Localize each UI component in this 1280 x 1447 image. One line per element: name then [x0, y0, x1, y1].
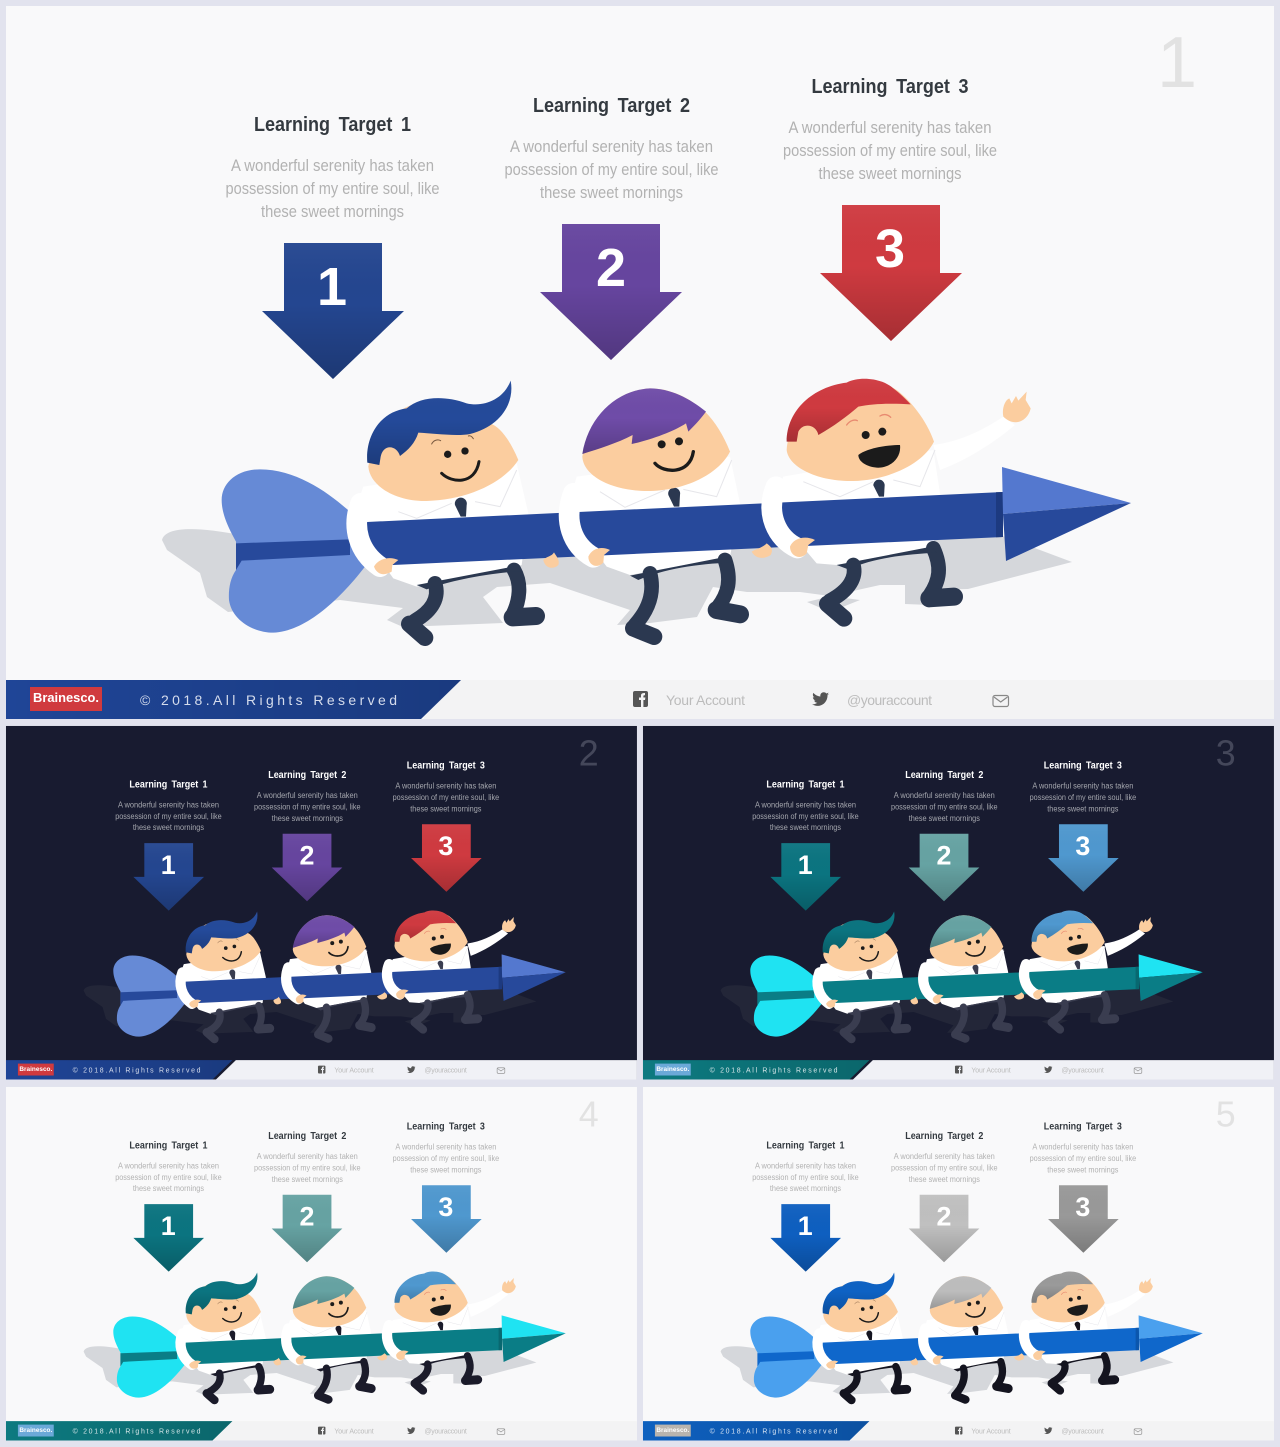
slide 4 column: Learning Target 2: possession of my entire soul, like — [254, 1163, 361, 1172]
slide 2 column: Learning Target 1 — [115, 780, 222, 832]
slide 5 arrow 2 — [909, 1195, 979, 1262]
slide 2 column: Learning Target 3: these sweet mornings — [410, 804, 481, 813]
slide 5 column: Learning Target 3: A wonderful serenity has taken — [1032, 1143, 1134, 1152]
slide 1 arrow 2: 2 — [596, 238, 626, 298]
slide 1 column: Learning Target 2: these sweet mornings — [540, 184, 683, 202]
slide 5 column: Learning Target 2: A wonderful serenity has taken — [894, 1152, 995, 1161]
slide 5 footer: © 2018.All Rights Reserved — [710, 1428, 838, 1436]
slide 2 arrow 1: 1 — [161, 850, 176, 880]
slide 2 column: Learning Target 1: these sweet mornings — [133, 823, 204, 832]
slide 5 column: Learning Target 3: these sweet mornings — [1047, 1165, 1118, 1174]
slide 5 background panel — [643, 1087, 1274, 1440]
slide 4 column: Learning Target 1: possession of my entire soul, like — [115, 1173, 222, 1182]
slide 3 column: Learning Target 3 — [1030, 761, 1137, 813]
slide 5 column: Learning Target 1 — [752, 1141, 859, 1193]
slide 3 footer — [643, 1060, 1274, 1079]
slide 4 arrow 2 — [272, 1195, 342, 1262]
slide 3 column: Learning Target 2: these sweet mornings — [909, 814, 980, 823]
slide 5 footer: Brainesco. — [656, 1427, 689, 1434]
slide 2 column: Learning Target 1: possession of my entire soul, like — [115, 812, 222, 821]
slide 3 arrow 1 — [770, 843, 841, 911]
slide 2 footer: Brainesco. — [19, 1066, 52, 1073]
slide 4 arrow 1: 1 — [161, 1211, 176, 1241]
slide 5: light slide, blue and grey palette — [643, 1087, 1274, 1440]
slide 4 column: Learning Target 1: Learning Target 1 — [129, 1141, 208, 1152]
slide 3 footer: Brainesco. — [656, 1066, 689, 1073]
slide 1 column: Learning Target 1: Learning Target 1 — [254, 114, 411, 136]
slide 1 column: Learning Target 3 — [783, 76, 997, 183]
slide 4 footer: Your Account — [334, 1429, 374, 1436]
dart fletching — [222, 469, 365, 633]
slide 4 page number: 4 — [579, 1095, 599, 1135]
slide 1 column: Learning Target 3: A wonderful serenity has taken — [788, 119, 992, 137]
slide 3 column: Learning Target 3: possession of my entire soul, like — [1030, 793, 1137, 802]
slide 3 background panel — [643, 726, 1274, 1079]
slide 3 column: Learning Target 2: possession of my entire soul, like — [891, 802, 998, 811]
slide 3: dark slide, teal palette — [643, 726, 1274, 1079]
slide 2 column: Learning Target 3: Learning Target 3 — [407, 761, 485, 772]
slide 1 footer: © 2018.All Rights Reserved — [140, 692, 397, 708]
slide 4 illustration: three men carrying a dart — [84, 1272, 566, 1400]
slide 5 arrow 1 — [770, 1204, 841, 1272]
slide 3 footer: Your Account — [971, 1068, 1011, 1075]
slide 2 column: Learning Target 1: Learning Target 1 — [129, 780, 208, 791]
slide 1 footer: @youraccount — [847, 692, 932, 708]
slide 3 illustration: three men carrying a dart — [721, 911, 1203, 1039]
slide 5 column: Learning Target 2: Learning Target 2 — [905, 1131, 984, 1142]
slide 4 column: Learning Target 3: these sweet mornings — [410, 1165, 481, 1174]
slide 2 column: Learning Target 2: these sweet mornings — [272, 814, 343, 823]
man 2 with purple hair — [569, 388, 772, 566]
slide 5 column: Learning Target 2 — [891, 1131, 998, 1184]
slide 2 column: Learning Target 1: A wonderful serenity has taken — [118, 800, 219, 809]
slide 3 arrow 3 — [1048, 824, 1119, 892]
slide 5 arrow 1: 1 — [798, 1211, 813, 1241]
slide 4 column: Learning Target 3 — [393, 1122, 500, 1174]
slide 5 footer: Your Account — [971, 1429, 1011, 1436]
slide 5 column: Learning Target 1: Learning Target 1 — [766, 1141, 845, 1152]
slide 4 column: Learning Target 2: Learning Target 2 — [268, 1131, 347, 1142]
slide 4 column: Learning Target 1: these sweet mornings — [133, 1184, 204, 1193]
slide 2 footer: © 2018.All Rights Reserved — [73, 1067, 201, 1075]
slide 1 column: Learning Target 1: these sweet mornings — [261, 203, 404, 221]
slide 5 arrow 3 — [1048, 1185, 1119, 1253]
slide 5 footer: @youraccount — [1061, 1429, 1104, 1436]
slide 3 column: Learning Target 1 — [752, 780, 859, 832]
slide 5 column: Learning Target 1: possession of my entire soul, like — [752, 1173, 859, 1182]
slide 3 arrow 3: 3 — [1075, 831, 1090, 861]
slide 3 column: Learning Target 2 — [891, 770, 998, 823]
slide 1 page number: 1 — [1157, 23, 1197, 103]
slide 1 column: Learning Target 3: possession of my entire soul, like — [783, 142, 997, 160]
slide 2 footer: Your Account — [334, 1068, 374, 1075]
slide 2 column: Learning Target 2 — [254, 770, 361, 823]
slide 4 column: Learning Target 2: these sweet mornings — [272, 1175, 343, 1184]
slide 2 column: Learning Target 3: A wonderful serenity has taken — [395, 782, 497, 791]
man 1 with blue hair — [357, 381, 559, 574]
slide 1 arrow 1: 1 — [317, 257, 347, 317]
slide 3 column: Learning Target 1: A wonderful serenity has taken — [755, 800, 856, 809]
slide 5 footer — [643, 1421, 1274, 1440]
slide 1 arrow 3: 3 — [875, 219, 905, 279]
slide 5 column: Learning Target 3: Learning Target 3 — [1044, 1122, 1122, 1133]
slide 2 arrow 3 — [411, 824, 482, 892]
slide 2 arrow 1 — [133, 843, 204, 911]
slide 3 column: Learning Target 1: Learning Target 1 — [766, 780, 845, 791]
slide 2 column: Learning Target 2: Learning Target 2 — [268, 770, 347, 781]
slide 5 column: Learning Target 3 — [1030, 1122, 1137, 1174]
man 3 with red hair waving — [772, 379, 1031, 557]
slide 4 column: Learning Target 3: Learning Target 3 — [407, 1122, 485, 1133]
slide 5 illustration: three men carrying a dart — [721, 1272, 1203, 1400]
slide 5 page number: 5 — [1216, 1095, 1236, 1135]
slide 3 footer: © 2018.All Rights Reserved — [710, 1067, 838, 1075]
slide 5 column: Learning Target 1: these sweet mornings — [770, 1184, 841, 1193]
slide 3 column: Learning Target 2: A wonderful serenity has taken — [894, 791, 995, 800]
slide 4 arrow 3 — [411, 1185, 482, 1253]
slide 3 column: Learning Target 1: possession of my entire soul, like — [752, 812, 859, 821]
slide 1 column: Learning Target 2 — [504, 95, 718, 202]
slide 2 column: Learning Target 3 — [393, 761, 500, 813]
shirts and legs — [352, 450, 954, 638]
slide 3 column: Learning Target 3: these sweet mornings — [1047, 804, 1118, 813]
slide 1 illustration: three men carrying a dart — [162, 379, 1131, 638]
slide 1 column: Learning Target 1: possession of my entire soul, like — [226, 180, 440, 198]
slide 2 arrow 3: 3 — [438, 831, 453, 861]
slide 3 column: Learning Target 2: Learning Target 2 — [905, 770, 984, 781]
slide 4 footer: @youraccount — [424, 1429, 467, 1436]
slide 3 arrow 1: 1 — [798, 850, 813, 880]
slide 4 arrow 1 — [133, 1204, 204, 1272]
slide 4 footer — [6, 1421, 637, 1440]
slide 3 column: Learning Target 1: these sweet mornings — [770, 823, 841, 832]
slide 2: dark slide, blue purple red — [6, 726, 637, 1079]
slide 3 footer: @youraccount — [1061, 1068, 1104, 1075]
slide 2 footer — [6, 1060, 637, 1079]
slide 1 column: Learning Target 1 — [226, 114, 440, 221]
slide 4 column: Learning Target 1 — [115, 1141, 222, 1193]
slide 4 column: Learning Target 1: A wonderful serenity has taken — [118, 1161, 219, 1170]
slide 3 arrow 2 — [909, 834, 979, 901]
slide 4 background panel — [6, 1087, 637, 1440]
slide 2 column: Learning Target 3: possession of my entire soul, like — [393, 793, 500, 802]
slide 5 column: Learning Target 3: possession of my entire soul, like — [1030, 1154, 1137, 1163]
slide 2 arrow 2: 2 — [300, 841, 315, 870]
slide 1 arrow 2 — [540, 224, 682, 360]
slide 5 arrow 3: 3 — [1075, 1192, 1090, 1222]
slide 4 column: Learning Target 2: A wonderful serenity has taken — [257, 1152, 358, 1161]
slide 1 column: Learning Target 1: A wonderful serenity has taken — [231, 157, 434, 175]
slide 1 column: Learning Target 2: A wonderful serenity has taken — [510, 138, 713, 156]
slide 1 arrow 1 — [262, 243, 404, 379]
dart shaft — [367, 492, 1003, 565]
slide 3 column: Learning Target 3: A wonderful serenity has taken — [1032, 782, 1134, 791]
slide 3 column: Learning Target 3: Learning Target 3 — [1044, 761, 1122, 772]
slide 5 arrow 2: 2 — [937, 1202, 952, 1231]
slide 1 footer — [6, 680, 1274, 719]
slide 2 page number: 2 — [579, 734, 599, 774]
slide 2 arrow 2 — [272, 834, 342, 901]
slide 1 column: Learning Target 3: Learning Target 3 — [812, 76, 968, 98]
slide 5 column: Learning Target 1: A wonderful serenity has taken — [755, 1161, 856, 1170]
slide 1 arrow 3 — [820, 205, 962, 341]
slide 5 column: Learning Target 2: these sweet mornings — [909, 1175, 980, 1184]
slide 5 column: Learning Target 2: possession of my entire soul, like — [891, 1163, 998, 1172]
slide 4 footer: Brainesco. — [19, 1427, 52, 1434]
slide 1 column: Learning Target 2: Learning Target 2 — [533, 95, 690, 117]
slide 1 column: Learning Target 3: these sweet mornings — [818, 165, 962, 183]
slide 2 column: Learning Target 2: A wonderful serenity has taken — [257, 791, 358, 800]
slide 2 background panel — [6, 726, 637, 1079]
slide 4 arrow 2: 2 — [300, 1202, 315, 1231]
slide 4 arrow 3: 3 — [438, 1192, 453, 1222]
slide 1 background panel — [6, 6, 1274, 719]
slide 2 illustration: three men carrying a dart — [84, 911, 566, 1039]
slide 4 column: Learning Target 2 — [254, 1131, 361, 1184]
slide 2 footer: @youraccount — [424, 1068, 467, 1075]
slide 3 page number: 3 — [1216, 734, 1236, 774]
slide 4 footer: © 2018.All Rights Reserved — [73, 1428, 201, 1436]
slide 1 footer: Brainesco. — [33, 690, 99, 705]
slide 1: large light slide with blue, purple and red targets — [6, 6, 1274, 719]
slide 1 footer: Your Account — [666, 692, 745, 708]
slide 4 column: Learning Target 3: A wonderful serenity has taken — [395, 1143, 497, 1152]
slide 4 column: Learning Target 3: possession of my entire soul, like — [393, 1154, 500, 1163]
slide 3 arrow 2: 2 — [937, 841, 952, 870]
slide 4: light slide, teal palette — [6, 1087, 637, 1440]
slide 1 column: Learning Target 2: possession of my entire soul, like — [504, 161, 718, 179]
dart arrowhead — [1002, 467, 1131, 561]
slide 2 column: Learning Target 2: possession of my entire soul, like — [254, 802, 361, 811]
ground shadow — [162, 529, 1072, 627]
